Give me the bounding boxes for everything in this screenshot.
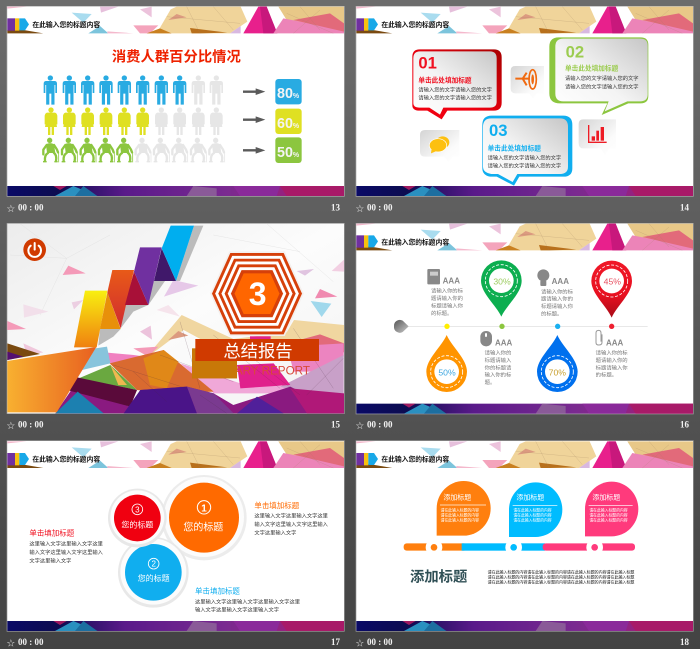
badge 50%: 50% [277, 145, 300, 161]
text block with mouse icon: 输入你的标 [485, 371, 512, 379]
bubble 03: 03 [489, 121, 508, 140]
text block bottom: 输入文字这里输入文字这里输入文字 [195, 606, 279, 614]
footer time and page: 14 [680, 203, 690, 213]
footer time and page: ☆ [355, 421, 364, 432]
icon: chat [420, 130, 459, 162]
section heading: 添加标题 [410, 568, 467, 585]
pictogram row: 60% [45, 107, 223, 135]
circle 1 [161, 475, 247, 560]
text block left: 这里输入文字这里输入文字这里 [29, 539, 103, 547]
icon: power button [23, 238, 46, 261]
card blue: 请在此输入标题的内容 [513, 508, 552, 513]
pictogram row: 50% [43, 138, 225, 162]
card blue: 请在此输入标题的内容 [513, 518, 552, 523]
circle 1: 您的标题 [183, 520, 223, 533]
bubble 03: 请输入您的文字请输入您的文字 [488, 153, 561, 161]
footer time and page [355, 637, 690, 649]
circle 2 [118, 537, 189, 608]
drop 50%: 50% [438, 368, 456, 378]
bubble 02: 请输入您的文字请输入您的文字 [565, 82, 638, 90]
footer time and page [6, 203, 341, 215]
text block right: 单击填加标题 [254, 500, 300, 510]
footer time and page [6, 637, 341, 649]
badge 60%: 60% [277, 116, 300, 132]
badge 80% [275, 79, 302, 104]
footer time and page [355, 203, 690, 215]
text block with mouse icon: AAA [495, 338, 513, 347]
paragraph: 请在此输入标题的内容请在此输入标题的内容请在此输入标题的内容请在此输入标题 [488, 573, 634, 579]
footer time and page: 00 : 00 [18, 420, 44, 430]
ribbon arrow [7, 226, 203, 412]
bubble 02 [549, 37, 648, 115]
bubble 03: 请输入您的文字请输入您的文字 [488, 162, 561, 170]
bubble 03 [482, 116, 572, 186]
footer time and page: ☆ [6, 421, 15, 432]
text block with paperclip icon: 标题请输入你 [596, 363, 628, 371]
chart title: 消费人群百分比情况 [112, 47, 241, 65]
bubble 01: 请输入您的文字请输入您的文字 [418, 85, 492, 93]
text block with mouse icon: 标题请输入 [485, 356, 512, 364]
header title: 在此输入您的标题内容 [381, 237, 449, 246]
paragraph [488, 568, 634, 584]
card pink: 请在此输入标题的内容 [589, 508, 628, 513]
text block with notebook icon: AAA [443, 276, 460, 285]
bubble 01: 01 [418, 53, 437, 72]
paragraph: 请在此输入标题的内容请在此输入标题的内容请在此输入标题的内容请在此输入标题 [488, 578, 634, 584]
card orange: 请在此输入标题的内容 [441, 513, 479, 518]
text block left: 输入文字这里输入文字这里输入 [29, 548, 104, 556]
circle 2: 您的标题 [138, 573, 170, 583]
badge 80%: 80% [277, 86, 300, 102]
header title: 在此输入您的标题内容 [32, 455, 100, 464]
circle 3: 您的标题 [121, 519, 153, 529]
slide 18: three drops and bar [355, 440, 694, 649]
text block with paperclip icon: 题请输入你的 [596, 356, 628, 364]
badge 50% [275, 137, 302, 163]
card pink: 请在此输入标题的内容 [589, 513, 628, 518]
text block with notebook icon: 请输入你的标 [431, 287, 464, 295]
text block with notebook icon [427, 269, 464, 317]
bubble 01 [412, 49, 502, 119]
paragraph: 请在此输入标题的内容请在此输入标题的内容请在此输入标题的内容请在此输入标题 [488, 568, 634, 574]
pin 30% [481, 260, 522, 317]
text block right: 输入文字这里输入文字这里输入 [254, 520, 329, 528]
text block left [29, 528, 104, 564]
pin 30%: 30% [493, 276, 511, 286]
slide 17: three circles [6, 440, 345, 649]
card blue: 请在此输入标题的内容 [513, 513, 552, 518]
text block with paperclip icon: 的标题。 [596, 371, 617, 379]
timeline bar [404, 539, 635, 556]
banner tab [250, 336, 271, 340]
text block with mouse icon: 你的标题请 [485, 363, 512, 371]
text block with notebook icon: 题请输入你的 [431, 294, 463, 302]
text block with bulb icon: AAA [552, 277, 569, 286]
footer time and page: 16 [680, 420, 690, 430]
slide 14: speech bubbles [355, 6, 694, 215]
slide 13: consumer percentages [6, 6, 345, 215]
text block with mouse icon: 请输入你的 [485, 348, 511, 356]
card blue: 添加标题 [516, 492, 544, 501]
hexagon badge 3 [210, 251, 304, 336]
footer time and page: ☆ [355, 204, 364, 215]
footer time and page [355, 420, 690, 432]
footer time and page: 00 : 00 [367, 420, 393, 430]
footer time and page: ☆ [6, 204, 15, 215]
circle 2: 2 [151, 560, 156, 569]
header title: 在此输入您的标题内容 [381, 20, 449, 29]
icon: target [511, 66, 544, 99]
text block with mouse icon [480, 331, 513, 386]
bubble 01: 请输入您的文字请输入您的文字 [418, 94, 492, 102]
slide 15: section cover [6, 223, 345, 432]
footer time and page: 00 : 00 [18, 637, 44, 647]
pin 45%: 45% [604, 277, 621, 287]
circle 1: 1 [201, 503, 207, 514]
text block with mouse icon: 题。 [485, 379, 495, 386]
card blue [509, 482, 562, 537]
text block with bulb icon: 标题请输入你 [541, 302, 574, 310]
bubble 02: 02 [566, 42, 584, 61]
card pink: 请在此输入标题的内容 [589, 518, 628, 523]
text block right [254, 500, 329, 536]
circle 3 [108, 489, 167, 547]
bubble 01: 单击此处填加标题 [418, 75, 472, 84]
bubble 03: 单击此处填加标题 [488, 143, 541, 152]
footer time and page: 00 : 00 [18, 203, 44, 213]
text block left: 文字这里输入文字 [29, 556, 71, 564]
text block right: 文字这里输入文字 [254, 528, 296, 536]
footer time and page [6, 420, 341, 432]
arrows [243, 88, 265, 154]
text block right: 这里输入文字这里输入文字这里 [254, 512, 328, 520]
text block with paperclip icon: 请输入你的标 [596, 348, 628, 356]
text block with notebook icon: 标题请输入你 [431, 301, 464, 309]
drop 70% [537, 335, 578, 392]
text block bottom [195, 585, 300, 614]
footer time and page: 18 [680, 637, 690, 647]
text block left: 单击填加标题 [29, 528, 75, 538]
card pink [585, 482, 638, 536]
text block with paperclip icon: AAA [606, 338, 624, 347]
footer time and page: 13 [331, 203, 341, 213]
card orange: 请在此输入标题的内容 [441, 518, 479, 523]
bubble 02: 单击此处填加标题 [565, 64, 619, 73]
card orange: 请在此输入标题的内容 [441, 508, 479, 513]
drop 50% [426, 335, 467, 392]
drop 70%: 70% [549, 368, 566, 378]
text block bottom: 单击填加标题 [195, 585, 240, 595]
pin 45% [591, 261, 632, 318]
timeline [394, 320, 648, 333]
card pink: 添加标题 [592, 492, 620, 501]
text block with notebook icon: 的标题。 [431, 309, 452, 317]
circle 3: 3 [135, 505, 140, 514]
hexagon badge 3: 3 [249, 276, 267, 312]
slide 16: timeline pins [355, 223, 694, 432]
bubble 02: 请输入您的文字请输入您的文字 [565, 74, 638, 82]
pictogram row: 80% [44, 75, 223, 105]
text block with bulb icon: 题请输入你的 [541, 295, 573, 303]
text block with bulb icon: 的标题。 [541, 310, 562, 318]
text block with bulb icon [537, 269, 574, 318]
title banner [195, 339, 319, 361]
title banner: 总结报告 [223, 341, 293, 361]
icon: bar chart [579, 119, 616, 155]
card orange: 添加标题 [443, 492, 471, 501]
header title: 在此输入您的标题内容 [381, 455, 449, 464]
badge 60% [275, 109, 302, 134]
subtitle: SUMMARY REPORT [199, 364, 310, 377]
footer time and page: 17 [331, 637, 341, 647]
footer time and page: 00 : 00 [367, 637, 393, 647]
polygon art [7, 224, 344, 413]
header title: 在此输入您的标题内容 [32, 20, 100, 29]
text block with paperclip icon [596, 330, 628, 379]
card orange [437, 481, 491, 536]
shade over subtitle [192, 361, 237, 378]
footer time and page: 00 : 00 [367, 203, 393, 213]
footer time and page: 15 [331, 420, 341, 430]
text block bottom: 这里输入文字这里输入文字这里输入文字这里 [195, 597, 300, 605]
text block with bulb icon: 请输入你的标 [541, 287, 574, 295]
